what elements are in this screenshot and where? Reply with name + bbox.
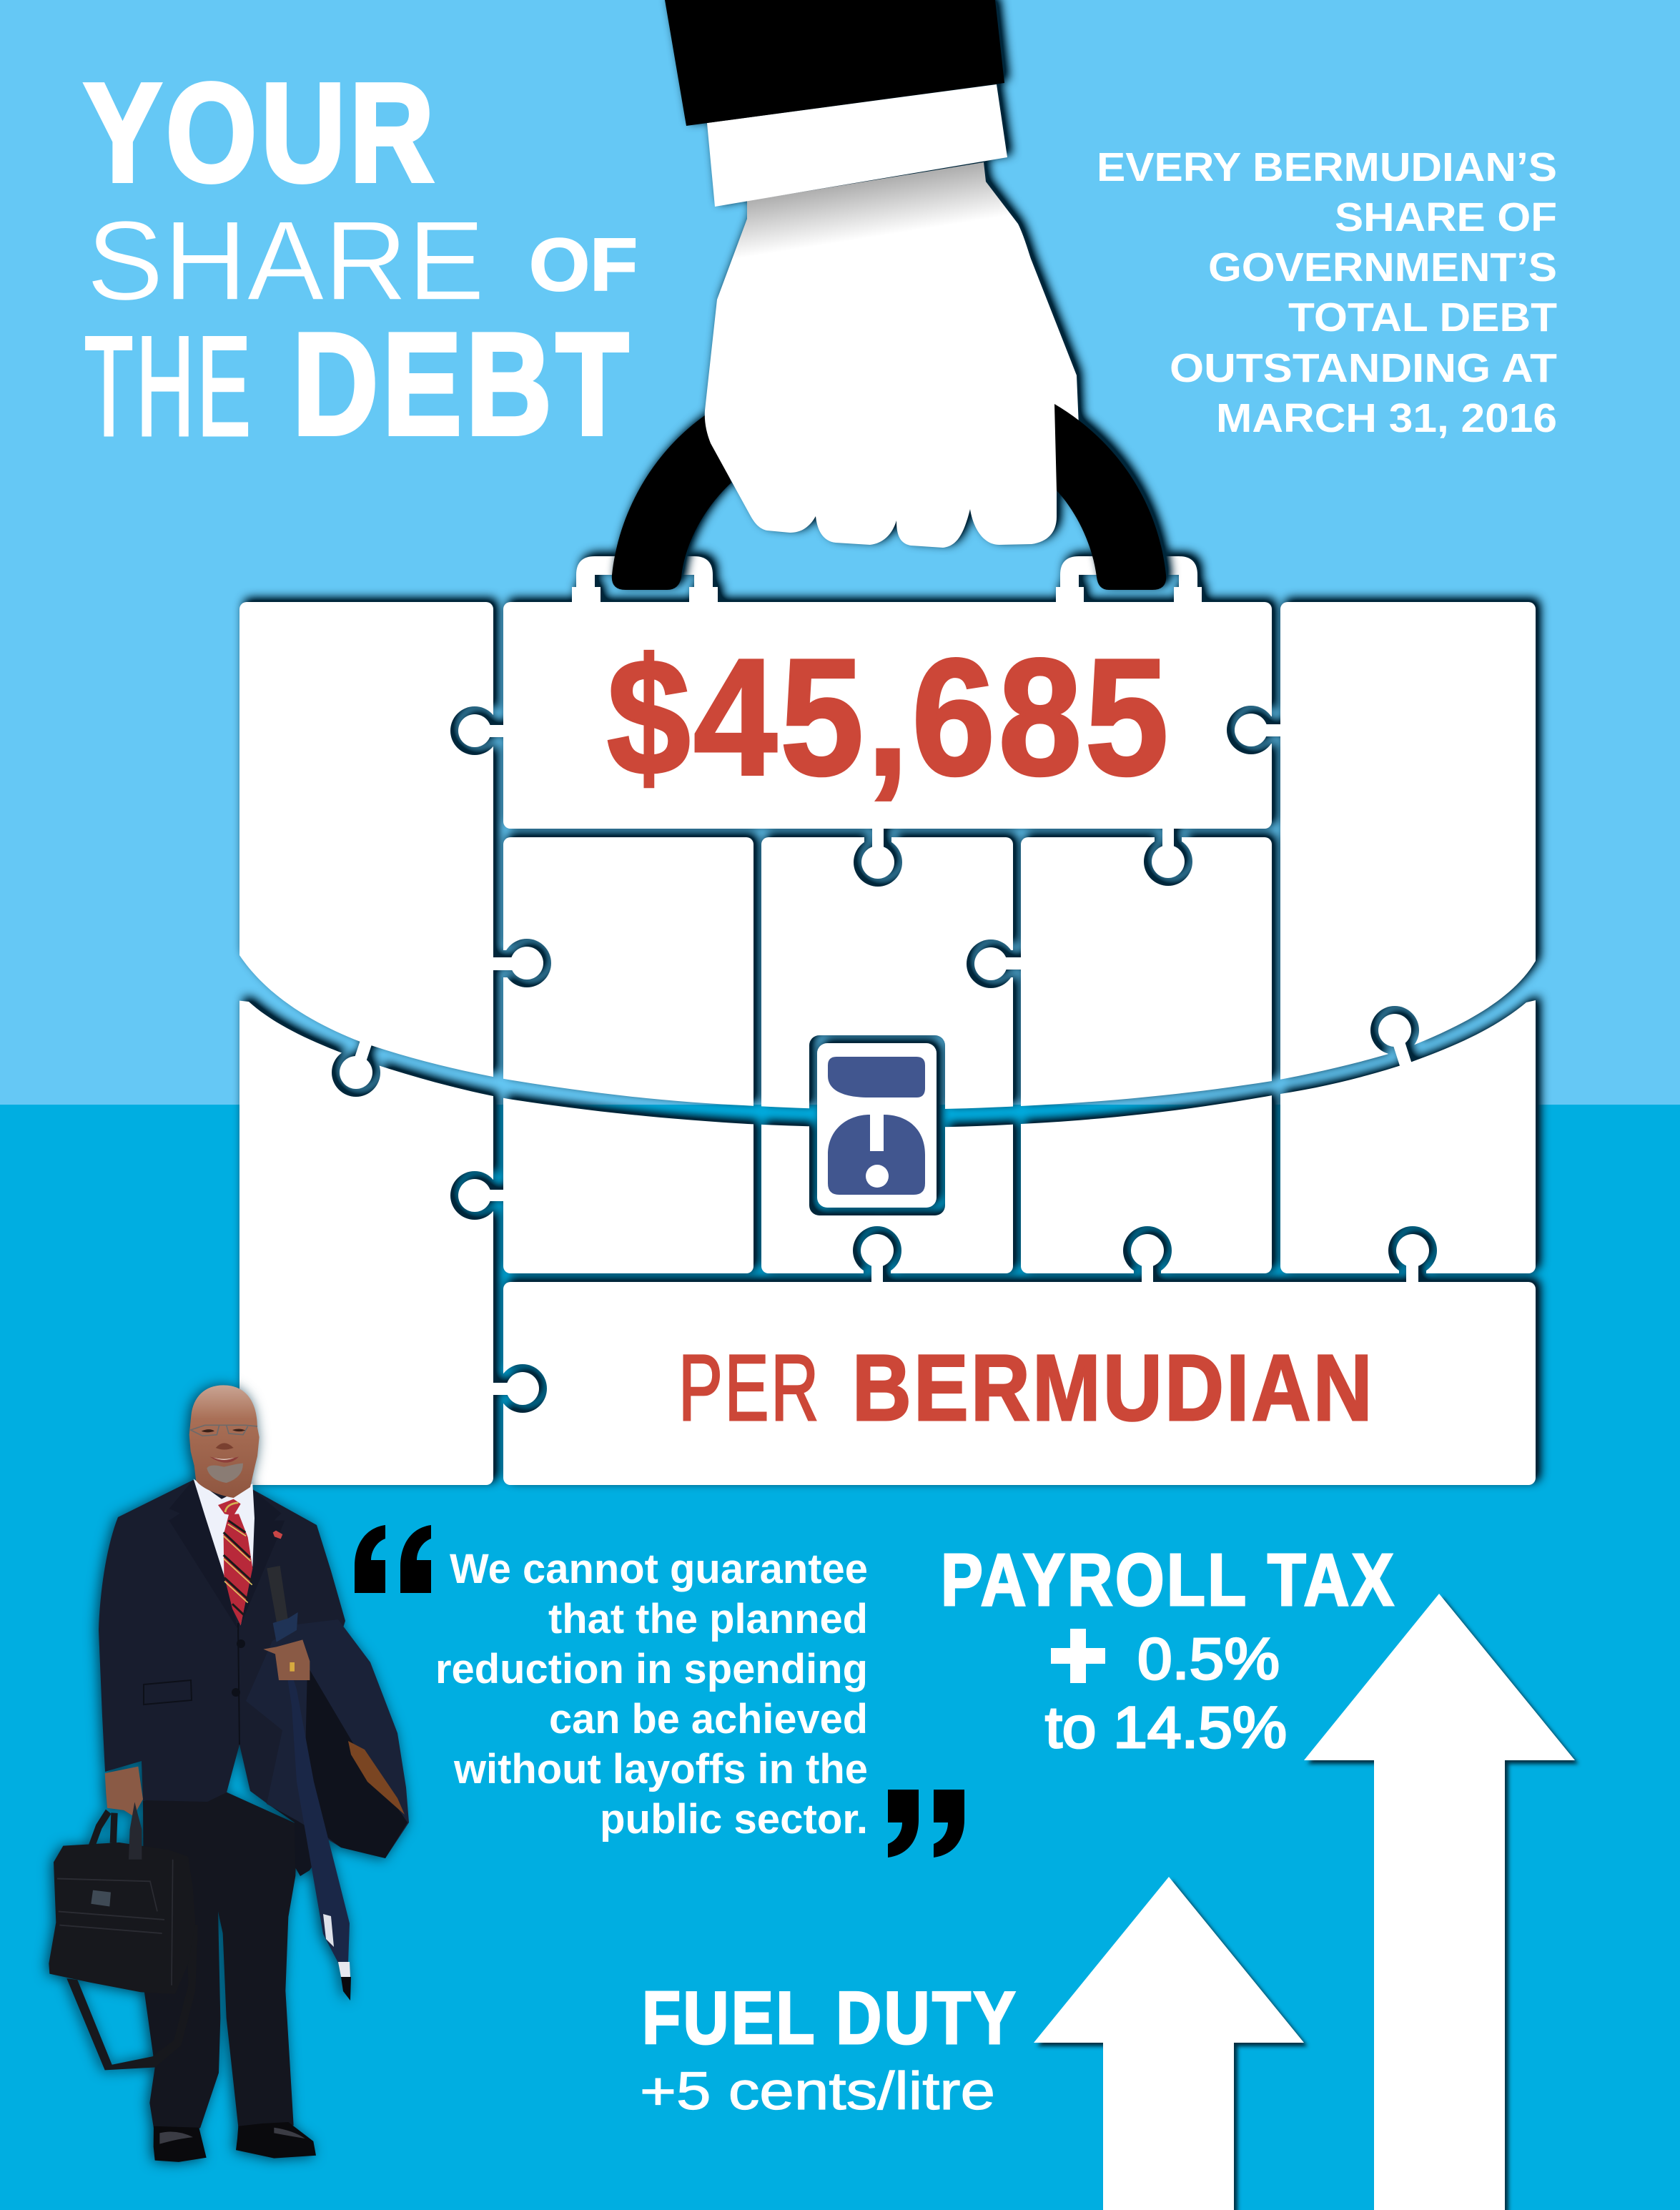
payroll tax callout: to 14.5% [1045,1695,1287,1760]
jigsaw panels [239,602,1536,1485]
right handle [1054,404,1166,590]
umbrella [282,1644,350,1963]
payroll tax callout [941,1539,1396,1760]
lining under the coat [267,1766,317,1876]
subtitle text block: OUTSTANDING AT [1170,345,1557,391]
trousers and shoes [143,1791,316,2162]
fuel duty callout [640,1977,1018,2121]
person: finance minister with bag, coat and umbrella [49,1385,409,2162]
arrow: fuel duty increase [1034,1877,1304,2210]
jacket sleeve [665,0,1004,126]
title [84,54,638,465]
left handle [612,415,731,590]
subtitle text block: MARCH 31, 2016 [1216,395,1557,441]
subtitle text block: TOTAL DEBT [1288,295,1557,340]
fist [705,162,1079,548]
title: DEBT [292,303,633,465]
quotation text: without layoffs in the [453,1746,868,1792]
bag and left hand [49,1767,198,2070]
lock plate [817,1043,937,1208]
umbrella strap and hand [263,1612,310,1680]
subtitle text block: GOVERNMENT’S [1208,245,1557,290]
fuel duty callout: +5 cents/litre [640,2061,995,2121]
quotation text: public sector. [600,1796,868,1843]
subtitle text block: SHARE OF [1335,194,1557,240]
briefcase made of jigsaw pieces [239,556,1536,1485]
quotation text: that the planned [548,1596,868,1642]
title: THE [84,307,254,465]
icon: briefcase lock [828,1057,925,1195]
title: SHARE [87,198,485,324]
subtitle text block: EVERY BERMUDIAN’S [1097,144,1557,190]
per Bermudian label [678,1335,1375,1440]
payroll tax callout: PAYROLL TAX [941,1539,1396,1621]
amount figure: $45,685 [607,625,1172,810]
quotation text: reduction in spending [435,1646,868,1692]
icon: plus sign [1051,1629,1105,1683]
fuel duty callout: FUEL DUTY [642,1977,1018,2060]
shirt cuff [707,84,1007,207]
quotation text: can be achieved [549,1696,868,1742]
title: YOUR [84,54,438,211]
quotation: closing mark [888,1790,964,1858]
quotation text: We cannot guarantee [450,1546,868,1592]
per Bermudian label: PER [678,1335,821,1440]
quotation text [435,1546,868,1843]
icon: hand gripping the briefcase handle [612,0,1166,590]
arrow: payroll tax increase [1304,1594,1575,2210]
suit jacket [99,1480,345,1822]
quotation: opening mark [355,1525,431,1593]
subtitle text block [1097,144,1557,441]
coat over arm [246,1619,409,1858]
handle buckles [572,556,1202,603]
jigsaw tabs [340,714,1429,1405]
title: OF [529,224,638,307]
shirt, tie and face [169,1385,289,1630]
payroll tax callout: 0.5% [1137,1627,1280,1692]
per Bermudian label: BERMUDIAN [852,1335,1375,1440]
